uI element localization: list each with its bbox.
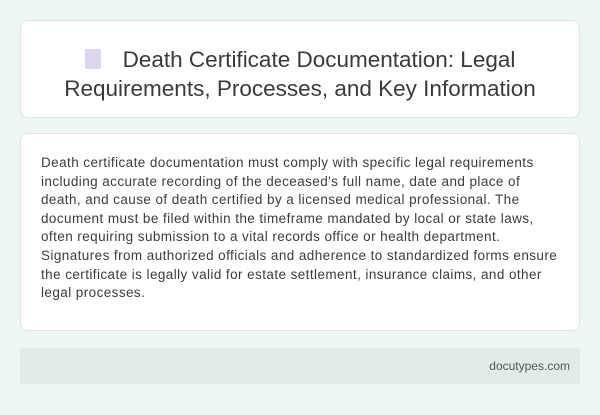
text panel [20, 133, 580, 331]
body text: legal processes. [41, 285, 145, 300]
body text: including accurate recording of the deceased's full name, date and place of [41, 174, 520, 189]
body text: the certificate is legally valid for estate settlement, insurance claims, and other [41, 267, 542, 282]
title: Requirements, Processes, and Key Information [64, 76, 536, 101]
footer [20, 348, 580, 384]
icon: document [85, 49, 101, 69]
footer text: docutypes.com [489, 359, 570, 373]
title: Death Certificate Documentation: Legal [123, 47, 515, 72]
body text: document must be filed within the timeframe mandated by local or state laws, [41, 211, 534, 226]
body text: Death certificate documentation must comply with specific legal requirements [41, 155, 534, 170]
body text: often requiring submission to a vital records office or health department. [41, 229, 500, 244]
body text: Signatures from authorized officials and adherence to standardized forms ensure [41, 248, 557, 263]
body text [41, 155, 557, 300]
title card [20, 20, 580, 118]
title [64, 47, 536, 101]
body text: death, and cause of death certified by a licensed medical professional. The [41, 192, 520, 207]
